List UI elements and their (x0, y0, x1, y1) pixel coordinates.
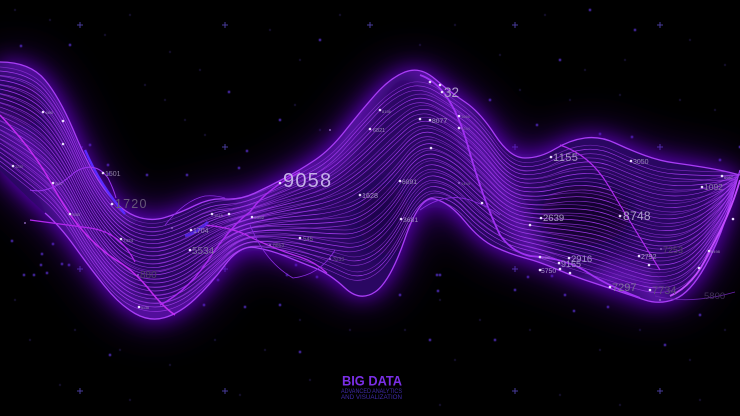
data labels: 8498 (711, 249, 721, 254)
logo subtitle (341, 388, 402, 401)
data labels: 1444 (461, 181, 471, 186)
data labels: 8156 (382, 109, 392, 114)
wave lines (0, 67, 740, 312)
data labels: 1155 (553, 152, 578, 164)
data labels: 9165 (561, 259, 581, 269)
data labels: 6957 (724, 175, 734, 180)
data labels: 1244 (461, 126, 471, 131)
data labels: 2639 (543, 213, 564, 224)
data labels: 2792 (641, 254, 657, 261)
data labels: 2916 (571, 254, 592, 265)
wave top and bottom edges (0, 62, 740, 319)
data labels: 1501 (105, 171, 121, 178)
data labels: 8748 (623, 209, 651, 223)
data labels: 8077 (432, 118, 447, 125)
data labels: 1704 (193, 228, 209, 235)
wave glow (0, 40, 740, 340)
data labels: 7424 (123, 238, 134, 243)
logo subtitle: AND VISUALIZATION (341, 394, 402, 401)
data labels: 5138 (141, 306, 149, 310)
data labels: 3050 (633, 159, 649, 166)
data labels: 6821 (373, 128, 385, 134)
data labels: 4490 (45, 111, 53, 115)
data labels: 3233 (333, 257, 344, 263)
data labels: 32 (444, 85, 459, 100)
data labels: 5534 (192, 246, 215, 257)
data labels: 7297 (612, 282, 636, 294)
data labels: 1092 (704, 182, 723, 192)
wave body (0, 62, 738, 318)
data labels: 7253 (663, 245, 683, 255)
data labels: 8352 (254, 215, 265, 220)
data labels (15, 85, 734, 310)
data labels: 1866 (461, 114, 471, 119)
data labels: 880 (140, 270, 157, 281)
data labels: 8853 (273, 243, 284, 249)
data labels: 3681 (403, 217, 418, 224)
data labels: 9058 (283, 170, 332, 192)
data points (13, 82, 733, 307)
data labels: 3230 (15, 165, 23, 169)
data labels: 1615 (214, 213, 224, 218)
data labels: 1720 (115, 197, 148, 211)
data labels: 545 (303, 237, 314, 243)
logo subtitle: ADVANCED ANALYTICS (341, 388, 402, 395)
grid plus marks (77, 22, 663, 394)
bright strands (0, 75, 740, 315)
data labels: 5800 (704, 291, 725, 302)
data labels: 6891 (402, 179, 417, 186)
logo title: BIG DATA (342, 374, 402, 388)
data labels: 5750 (541, 268, 556, 275)
data labels: 2017 (55, 182, 63, 186)
data labels: 7734 (652, 285, 676, 297)
data labels: 2492 (542, 256, 550, 260)
data labels: 1628 (362, 191, 378, 200)
data labels: 5085 (72, 213, 80, 217)
logo: big data (341, 374, 402, 401)
